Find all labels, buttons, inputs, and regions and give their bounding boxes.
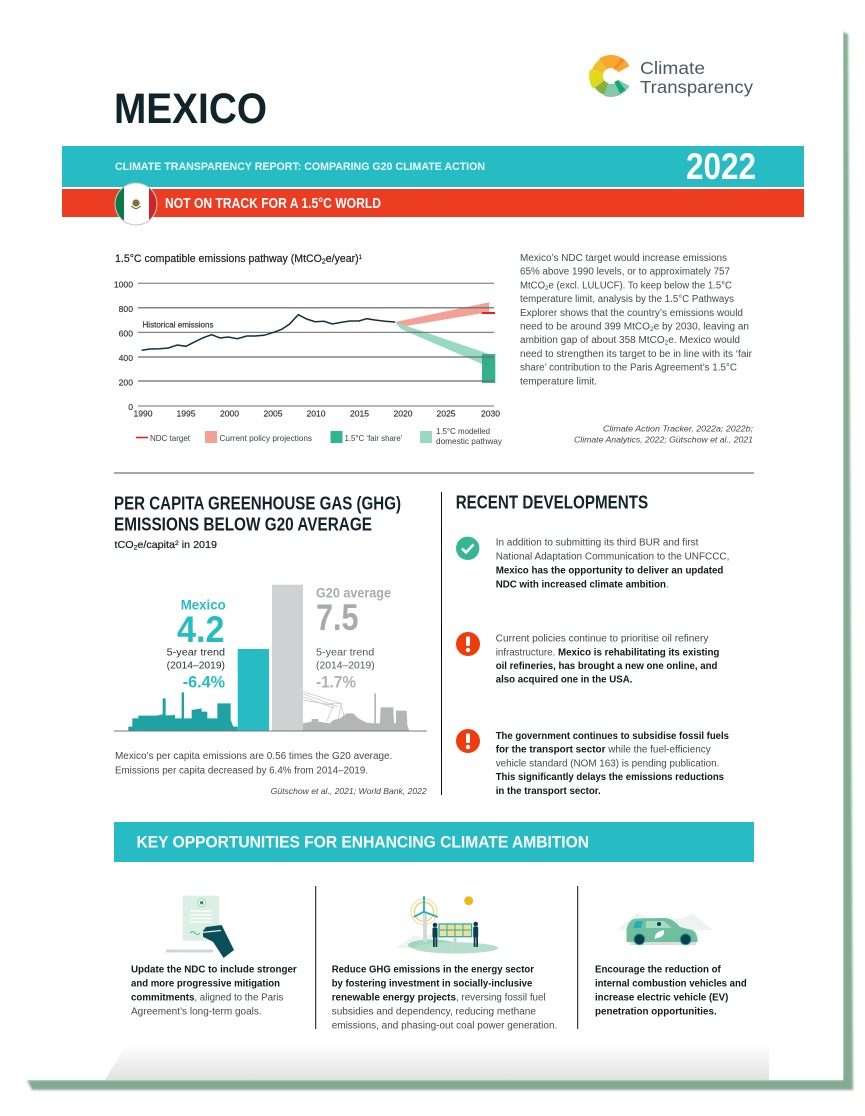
x axis labels: 2005 [263,408,283,418]
x axis labels: 2015 [350,408,369,418]
text block: per capita caption [115,751,392,777]
development item: oil refineries: infrastructure. Mexico is rehabilitating its existing [496,647,719,658]
skyline: Mexico [128,692,238,731]
chart title: 2 [322,258,326,266]
text block: NDC target summary: e (excl. LULUCF). To keep below the 1.5°C [549,280,732,292]
y axis labels: 0 [128,402,133,412]
current policy projection band [395,302,489,326]
chart legend [136,426,503,446]
skyline: G20 [303,692,409,731]
G20 figures: (2014–2019) [316,661,375,672]
text block: update the NDC: Update the NDC to include stronger [131,965,297,976]
logo: Climate Transparency [589,55,753,97]
text block: NDC target summary: e. Mexico would [668,335,740,346]
G20 figures: G20 average [316,584,391,600]
development item: updated NDC: NDC with increased climate ambition. [496,579,669,590]
text block: NDC target summary: need to be around 399 MtCO [520,322,650,332]
x axis labels: 2030 [481,408,500,418]
chart: per capita comparison [114,584,427,731]
x axis labels: 1995 [176,408,196,418]
x axis labels: 2020 [393,408,413,418]
bar: G20 [272,585,303,731]
source citation: chart [574,424,754,444]
chart title: e/year) [326,253,359,265]
development item: fossil fuel subsidies: vehicle standard (NOM 163) is pending publication. [496,759,719,770]
text block: NDC target summary: ambition gap of about 358 MtCO [520,335,665,346]
heading: per capita GHG: EMISSIONS BELOW G20 AVERAGE [114,515,372,535]
chart legend: 1.5°C ‘fair share’ [344,433,403,443]
heading: per capita GHG: 2 [134,544,138,552]
chart legend: NDC target [150,433,191,443]
Mexico figures: (2014–2019) [167,661,225,672]
text block: NDC target summary: temperature limit. [520,377,597,388]
text block: NDC target summary: temperature limit, analysis by the 1.5°C Pathways [520,294,734,305]
development item: fossil fuel subsidies: for the transport sector while the fuel-efficiency [496,744,711,755]
G20 figures: 5-year trend [316,647,374,658]
development item: fossil fuel subsidies [456,729,729,797]
heading: per capita GHG: tCO [114,540,133,551]
chart title: 1.5°C compatible emissions pathway (MtCO [115,253,322,265]
y axis labels: 200 [119,378,133,388]
text block: update the NDC: commitments, aligned to the Paris [131,993,283,1004]
G20 figures [316,584,391,691]
text block: update the NDC [131,965,297,1017]
development item: oil refineries: also acquired one in the USA. [496,675,633,686]
text block: NDC target summary: 2 [545,285,549,292]
y axis labels: 600 [119,328,133,338]
y axis labels: 800 [119,304,133,314]
Mexico figures [167,596,226,691]
chart legend: domestic pathway [436,436,503,446]
icon: electric vehicle [617,913,713,945]
Mexico figures: Mexico [181,596,226,612]
chart legend: Current policy projections [220,433,312,443]
x axis labels: 2010 [306,408,326,418]
heading: recent developments: RECENT DEVELOPMENTS [456,492,648,512]
development item: oil refineries: oil refineries, has brought a new one online, and [496,661,717,672]
icon: check mark [456,537,479,560]
source citation: per capita: Gütschow et al., 2021; World Bank, 2022 [271,786,427,796]
icon: Mexican flag [115,183,157,225]
logo: Climate Transparency: Climate [640,58,705,78]
development item: fossil fuel subsidies: This significantly delays the emissions reductions [496,772,724,783]
development item: fossil fuel subsidies: The government continues to subsidise fossil fuels [496,731,729,742]
text block: encourage EV: internal combustion vehicles and [595,979,747,990]
status band: not on track: NOT ON TRACK FOR A 1.5°C WORLD [165,196,381,212]
chart: emissions pathway [114,253,503,446]
source citation: chart: Climate Analytics, 2022; Gütschow et al., 2021 [574,434,753,444]
development item: updated NDC: In addition to submitting its third BUR and first [496,538,699,549]
header band: report name and year: 2022 [686,146,756,187]
text block: NDC target summary: e by 2030, leaving an [654,322,749,332]
heading: per capita GHG: e/capita [137,540,175,551]
text block: per capita caption: Mexico’s per capita emissions are 0.56 times the G20 average. [115,751,392,762]
x axis labels: 2025 [436,408,456,418]
development item: updated NDC: Mexico has the opportunity to deliver an updated [496,565,723,576]
historical emissions label: Historical emissions [142,321,214,330]
banner: key opportunities [114,822,754,862]
text block: NDC target summary: Mexico’s NDC target would increase emissions [520,253,727,264]
heading: per capita GHG [114,493,401,552]
development item: oil refineries [456,632,719,686]
chart legend: 1.5°C modelled [436,426,490,436]
source citation: chart: Climate Action Tracker, 2022a; 2022b; [603,424,754,434]
text block: reduce GHG emissions: renewable energy projects, reversing fossil fuel [332,993,546,1004]
text block: NDC target summary [520,253,753,388]
text block: reduce GHG emissions: by fostering investment in socially-inclusive [332,979,533,990]
text block: per capita caption: Emissions per capita decreased by 6.4% from 2014–2019. [115,766,368,777]
heading: per capita GHG: 2 [175,540,179,547]
NDC target marker [482,312,495,314]
development item: updated NDC [456,537,729,590]
header band: report name and year [62,146,804,187]
header band: report name and year: CLIMATE TRANSPARENCY REPORT: COMPARING G20 CLIMATE ACTION [115,161,485,173]
text block: update the NDC: Agreement’s long-term goals. [131,1006,262,1017]
status band: not on track [62,189,804,217]
heading: per capita GHG: in 2019 [179,540,217,551]
G20 figures: -1.7% [316,672,356,691]
text block: reduce GHG emissions: Reduce GHG emissions in the energy sector [332,965,534,976]
text block: reduce GHG emissions: emissions, and phasing-out coal power generation. [332,1020,557,1031]
text block: NDC target summary: share’ contribution to the Paris Agreement’s 1.5°C [520,363,737,374]
G20 figures: 7.5 [316,597,358,638]
domestic pathway band [395,322,489,367]
text block: encourage EV: penetration opportunities. [595,1006,717,1017]
y axis labels [114,280,133,412]
y axis labels: 1000 [114,280,133,290]
development item: updated NDC: National Adaptation Communication to the UNFCCC, [496,552,729,563]
Mexico figures: -6.4% [183,672,225,691]
logo: Climate Transparency: Transparency [640,77,753,97]
title: MEXICO [114,85,267,133]
text block: encourage EV: increase electric vehicle (EV) [595,993,728,1004]
text block: reduce GHG emissions [332,965,557,1031]
y axis labels: 400 [119,353,133,363]
Mexico figures: 4.2 [177,609,224,650]
banner: key opportunities: KEY OPPORTUNITIES FOR ENHANCING CLIMATE AMBITION [136,832,589,852]
fair share range [482,354,495,383]
text block: reduce GHG emissions: subsidies and dependency, reducing methane [332,1006,536,1017]
bar: Mexico [238,649,269,731]
text block: encourage EV [595,965,747,1017]
icon: renewable energy [396,896,498,954]
Mexico figures: 5-year trend [167,647,225,658]
text block: NDC target summary: Explorer shows that the country’s emissions would [520,308,743,319]
text block: NDC target summary: 65% above 1990 levels, or to approximately 757 [520,267,730,278]
x axis labels: 2000 [220,408,239,418]
text block: NDC target summary: 2 [650,326,654,333]
text block: update the NDC: and more progressive mitigation [131,979,280,990]
text block: encourage EV: Encourage the reduction of [595,965,721,976]
historical emissions line [142,315,395,350]
text block: NDC target summary: 2 [665,340,669,347]
grid lines [138,283,494,406]
development item: oil refineries: Current policies continue to prioritise oil refinery [496,634,708,645]
text block: NDC target summary: MtCO [520,280,546,292]
heading: per capita GHG: PER CAPITA GREENHOUSE GAS (GHG) [114,493,401,513]
x axis labels: 1990 [133,408,153,418]
icon: warning [456,729,480,753]
development item: fossil fuel subsidies: in the transport sector. [496,786,601,797]
text block: NDC target summary: need to strengthen its target to be in line with its ‘fair [520,349,753,360]
icon: warning [456,632,480,656]
icon: signing document [166,896,234,958]
chart title: 1 [359,255,363,261]
x axis labels [133,408,500,418]
